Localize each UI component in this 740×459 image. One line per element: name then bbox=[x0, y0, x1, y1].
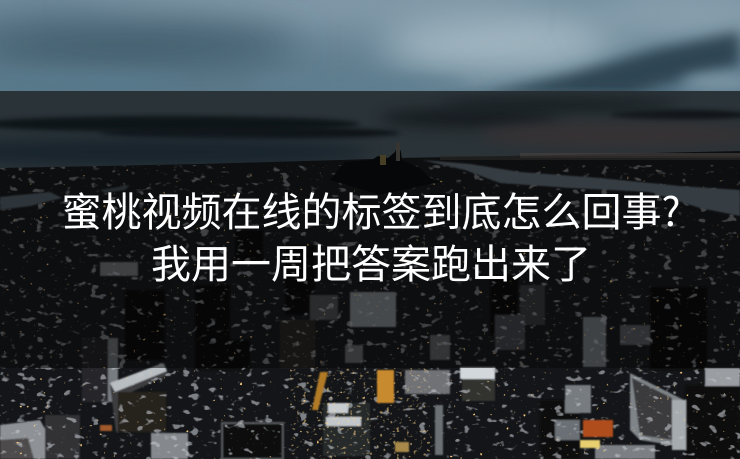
city base bbox=[0, 151, 740, 459]
title: 我用一周把答案跑出来了 bbox=[151, 232, 591, 290]
midtown and foreground towers bbox=[0, 230, 740, 459]
rivers bbox=[0, 160, 740, 216]
speckled rooftops and window lights bbox=[0, 165, 740, 459]
distant skyline with tower bbox=[330, 143, 740, 195]
title bbox=[62, 180, 680, 290]
dark translucent band bbox=[0, 91, 740, 368]
lit streets and glowing blocks bbox=[100, 370, 613, 455]
sky and clouds bbox=[0, 0, 740, 176]
title: 蜜桃视频在线的标签到底怎么回事? bbox=[62, 180, 680, 238]
